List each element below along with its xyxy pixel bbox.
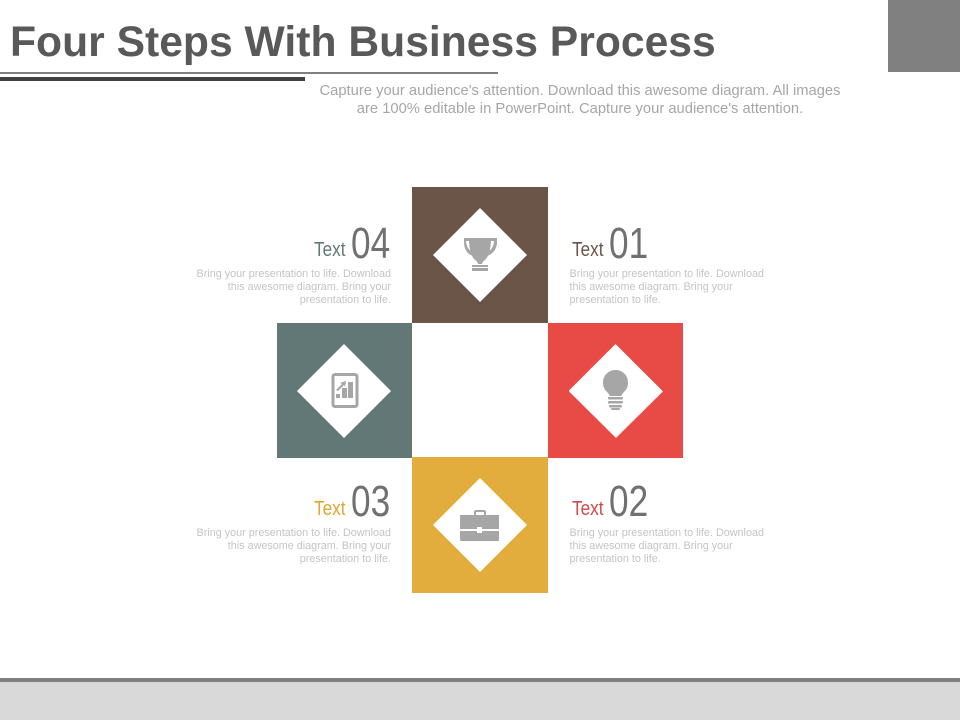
corner block xyxy=(888,0,960,72)
panel: step 01 brown square with trophy xyxy=(412,187,548,323)
label: step 02 xyxy=(572,477,648,526)
text: step 04 body: presentation to life. xyxy=(300,294,391,306)
label: step 04 xyxy=(314,219,390,268)
text: step 02 body: presentation to life. xyxy=(570,553,661,565)
subtitle xyxy=(320,83,840,117)
footer band xyxy=(0,678,960,720)
text: step 03 body: this awesome diagram. Bring your xyxy=(228,540,391,552)
text: step 01 body: this awesome diagram. Bring your xyxy=(570,281,733,293)
title underline xyxy=(0,72,498,81)
text: step 04 body: this awesome diagram. Bring your xyxy=(228,281,391,293)
label: step 04: 04 xyxy=(351,219,390,268)
label: step 03: Text xyxy=(314,498,346,520)
text: step 02 body: Bring your presentation to life. Download xyxy=(570,527,764,539)
label: step 01: 01 xyxy=(609,219,648,268)
text: step 02 body: this awesome diagram. Bring your xyxy=(570,540,733,552)
text: step 03 body: presentation to life. xyxy=(300,553,391,565)
text: step 04 body xyxy=(197,268,391,306)
text: step 01 body xyxy=(570,268,764,306)
text: step 01 body: Bring your presentation to life. Download xyxy=(570,268,764,280)
label: step 04: Text xyxy=(314,239,346,261)
text: step 03 body: Bring your presentation to life. Download xyxy=(197,527,391,539)
label: step 03 xyxy=(314,477,390,526)
subtitle: are 100% editable in PowerPoint. Capture your audience's attention. xyxy=(357,101,803,117)
label: step 03: 03 xyxy=(351,477,390,526)
subtitle: Capture your audience's attention. Download this awesome diagram. All images xyxy=(320,83,840,99)
text: step 01 body: presentation to life. xyxy=(570,294,661,306)
label: step 02: Text xyxy=(572,498,604,520)
text: step 04 body: Bring your presentation to life. Download xyxy=(197,268,391,280)
label: step 02: 02 xyxy=(609,477,648,526)
title: Four Steps With Business Process xyxy=(10,18,716,66)
panel: step 04 slate square with chart xyxy=(277,323,412,458)
text: step 02 body xyxy=(570,527,764,565)
panel: step 03 gold square with briefcase xyxy=(412,457,548,593)
label: step 01 xyxy=(572,219,648,268)
label: step 01: Text xyxy=(572,239,604,261)
panel: step 02 red square with bulb xyxy=(548,323,683,458)
text: step 03 body xyxy=(197,527,391,565)
